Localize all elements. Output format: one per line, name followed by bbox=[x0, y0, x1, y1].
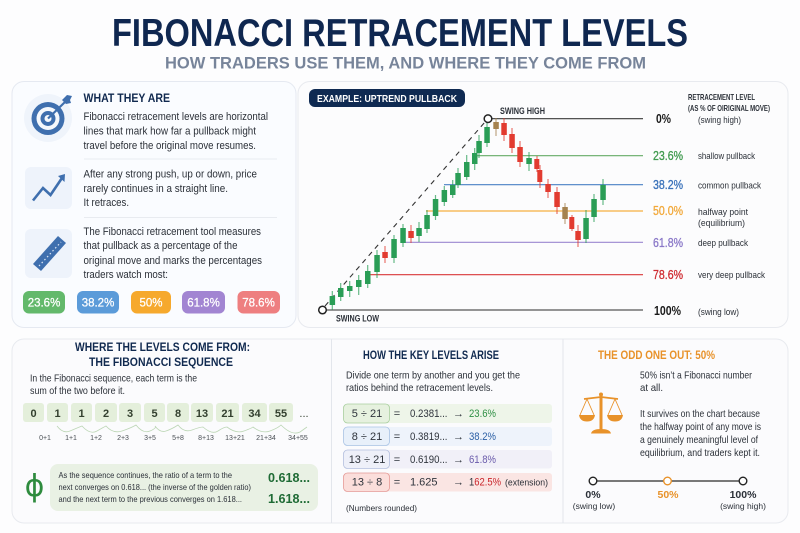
sequence tiles: 8 bbox=[175, 408, 181, 420]
heading: sequence: WHERE THE LEVELS COME FROM: bbox=[75, 340, 250, 354]
ratio row 38.2: 38.2% bbox=[469, 431, 496, 443]
level pills: 61.8% bbox=[187, 298, 220, 310]
sequence tiles: 1 bbox=[54, 408, 61, 420]
sum connectors bbox=[57, 425, 307, 433]
callout: golden ratio: 1.618... bbox=[268, 491, 310, 506]
ratio row 162.5: (extension) bbox=[505, 478, 548, 488]
text block: definition: Fibonacci retracement levels are horizontal bbox=[84, 111, 268, 123]
ratio row 162.5: → bbox=[453, 476, 464, 488]
text block: 50% note: 50% isn’t a Fibonacci number bbox=[640, 370, 753, 382]
sequence tiles: 0 bbox=[30, 408, 37, 420]
level pills: 38.2% bbox=[82, 298, 114, 310]
text block: sequence intro: In the Fibonacci sequence, each term is the bbox=[30, 374, 197, 384]
ratio row 162.5: 162.5% bbox=[469, 476, 501, 488]
level descriptions: deep pullback bbox=[698, 238, 748, 249]
retracement lines bbox=[326, 119, 643, 310]
ratio row 38.2: → bbox=[453, 431, 464, 443]
text block: 50% note: the halfway point of any move is bbox=[640, 422, 761, 433]
swing high marker: SWING HIGH bbox=[500, 106, 545, 116]
heading: key levels: HOW THE KEY LEVELS ARISE bbox=[363, 350, 499, 362]
midpoint scale: 0% bbox=[585, 489, 601, 501]
panel: chart bbox=[298, 82, 788, 328]
text block: 50% note bbox=[640, 370, 761, 459]
level pills: 50% bbox=[139, 298, 163, 310]
ratio row 61.8: 13 ÷ 21 bbox=[349, 454, 385, 466]
level descriptions: halfway point bbox=[698, 207, 748, 218]
ratio row 162.5: = bbox=[394, 476, 400, 488]
text block: 50% note: a genuinely meaningful level of bbox=[640, 435, 758, 446]
chart label bbox=[309, 89, 465, 107]
midpoint scale: 100% bbox=[730, 489, 757, 501]
sequence tiles: 55 bbox=[275, 408, 287, 420]
level descriptions: (swing low) bbox=[698, 307, 739, 318]
icon: balance scale bbox=[579, 392, 623, 434]
ratio row 23.6 bbox=[344, 404, 552, 423]
level pills: 78.6% bbox=[242, 298, 275, 310]
ratio row 61.8: 0.6190... bbox=[410, 454, 448, 466]
level labels: 0% bbox=[656, 112, 671, 126]
callout: golden ratio: next converges on 0.618... (the inverse of the golden ratio) bbox=[58, 482, 251, 492]
ratio row 23.6: → bbox=[453, 408, 464, 420]
text block: key levels intro: ratios behind the retracement levels. bbox=[346, 383, 493, 394]
ratio row 162.5: 1.625 bbox=[410, 476, 438, 488]
level labels: 38.2% bbox=[653, 178, 683, 192]
legend header: RETRACEMENT LEVEL bbox=[688, 92, 755, 102]
sum labels bbox=[39, 435, 308, 442]
legend header: (AS % OF OIRIGINAL MOVE) bbox=[688, 104, 770, 113]
text block: retraces: It retraces. bbox=[84, 197, 129, 209]
heading: what they are: WHAT THEY ARE bbox=[84, 91, 170, 105]
midpoint scale: (swing high) bbox=[720, 501, 766, 511]
text block: sequence intro bbox=[30, 374, 197, 397]
sequence tiles: 1 bbox=[78, 408, 85, 420]
swing low marker: SWING LOW bbox=[336, 314, 379, 324]
icon: phi: ϕ bbox=[25, 469, 44, 504]
text block: retraces bbox=[84, 168, 257, 209]
midpoint scale: (swing low) bbox=[573, 501, 615, 511]
panel: what they are bbox=[12, 82, 296, 328]
swing high marker bbox=[484, 106, 545, 122]
level descriptions bbox=[698, 115, 765, 318]
text block: key levels intro: Divide one term by another and you get the bbox=[346, 370, 520, 382]
heading: odd one out: THE ODD ONE OUT: 50% bbox=[598, 350, 715, 362]
section: odd one out bbox=[573, 350, 766, 511]
level pills bbox=[23, 291, 280, 314]
icon: ruler bbox=[25, 229, 72, 278]
level labels: 100% bbox=[654, 304, 681, 318]
level labels: 78.6% bbox=[653, 268, 683, 282]
sequence tiles: 2 bbox=[103, 408, 109, 420]
sequence tiles: ... bbox=[299, 408, 309, 420]
sum labels: 2+3 bbox=[117, 435, 129, 442]
legend header bbox=[688, 92, 770, 113]
subtitle: HOW TRADERS USE THEM, AND WHERE THEY COME FROM bbox=[165, 54, 646, 72]
text block: definition bbox=[84, 111, 268, 152]
sum labels: 5+8 bbox=[172, 435, 184, 442]
midpoint scale: 50% bbox=[657, 489, 679, 501]
sum labels: 34+55 bbox=[288, 435, 308, 442]
candlesticks bbox=[330, 118, 606, 310]
sum labels: 8+13 bbox=[198, 435, 214, 442]
text block: 50% note: It survives on the chart because bbox=[640, 409, 760, 420]
callout: golden ratio: 0.618... bbox=[268, 470, 310, 485]
ratio row 23.6: 5 ÷ 21 bbox=[352, 408, 382, 420]
text block: 50% note: at all. bbox=[640, 383, 663, 394]
title: FIBONACCI RETRACEMENT LEVELS bbox=[112, 12, 688, 55]
text block: retraces: After any strong push, up or down, price bbox=[84, 168, 257, 180]
heading: sequence: THE FIBONACCI SEQUENCE bbox=[89, 355, 233, 369]
ratio row 38.2: = bbox=[394, 431, 400, 443]
sum labels: 1+1 bbox=[65, 435, 77, 442]
ratio row 162.5 bbox=[344, 473, 552, 492]
level descriptions: shallow pullback bbox=[698, 151, 755, 162]
ratio row 23.6: 23.6% bbox=[469, 408, 496, 420]
sequence tiles: 5 bbox=[151, 408, 158, 420]
ratio row 23.6: 0.2381... bbox=[410, 408, 448, 420]
chart label: EXAMPLE: UPTREND PULLBACK bbox=[317, 93, 457, 105]
note: rounded: (Numbers rounded) bbox=[346, 503, 417, 513]
ratio row 23.6: = bbox=[394, 408, 400, 420]
sequence tiles: 21 bbox=[221, 408, 234, 420]
level descriptions: (equilibrium) bbox=[698, 218, 745, 229]
text block: sequence intro: sum of the two before it. bbox=[30, 386, 125, 397]
level labels bbox=[653, 112, 683, 318]
level labels: 23.6% bbox=[653, 149, 683, 163]
sum labels: 3+5 bbox=[144, 435, 156, 442]
level pills: 23.6% bbox=[28, 298, 60, 310]
level descriptions: (swing high) bbox=[698, 115, 741, 126]
midpoint scale bbox=[573, 477, 766, 511]
sequence tiles: 13 bbox=[196, 408, 208, 420]
level descriptions: very deep pullback bbox=[698, 270, 765, 281]
text block: definition: travel before the original move resumes. bbox=[84, 140, 256, 152]
callout: golden ratio bbox=[50, 464, 318, 511]
ratio row 61.8 bbox=[344, 450, 552, 468]
sequence tiles: 34 bbox=[248, 408, 261, 420]
dashed trend line bbox=[325, 122, 485, 306]
sum labels: 21+34 bbox=[256, 435, 276, 442]
text block: key levels intro bbox=[346, 370, 520, 394]
section: where the levels come from bbox=[23, 340, 318, 511]
callout: golden ratio: and the next term to the previous converges on 1.618... bbox=[58, 494, 242, 504]
ratio row 162.5: 13 ÷ 8 bbox=[352, 476, 382, 488]
heading: sequence bbox=[75, 340, 250, 369]
section: how the key levels arise bbox=[344, 350, 552, 513]
panel: bottom band bbox=[12, 339, 788, 523]
ratio row 61.8: 61.8% bbox=[469, 454, 496, 466]
sequence tiles: 3 bbox=[127, 408, 133, 420]
ratio row 38.2 bbox=[344, 427, 552, 446]
sum labels: 1+2 bbox=[90, 435, 102, 442]
callout: golden ratio: As the sequence continues, the ratio of a term to the bbox=[58, 470, 232, 480]
text block: tool: traders watch most: bbox=[84, 269, 168, 281]
ratio row 38.2: 0.3819... bbox=[410, 431, 448, 443]
swing low marker bbox=[319, 306, 379, 324]
level labels: 50.0% bbox=[653, 204, 683, 218]
text block: 50% note: equilibrium, and traders kept it. bbox=[640, 448, 760, 459]
ratio row 38.2: 8 ÷ 21 bbox=[352, 431, 382, 443]
level labels: 61.8% bbox=[653, 236, 683, 250]
level descriptions: common pullback bbox=[698, 180, 761, 192]
ratio row 61.8: → bbox=[453, 454, 464, 466]
sum labels: 0+1 bbox=[39, 435, 51, 442]
icon: target bbox=[24, 94, 72, 142]
sum labels: 13+21 bbox=[225, 435, 245, 442]
text block: tool bbox=[84, 226, 262, 281]
text block: definition: lines that mark how far a pullback might bbox=[84, 126, 257, 138]
sequence tiles bbox=[23, 403, 309, 422]
text block: tool: original move and marks the percentages bbox=[84, 255, 262, 267]
text block: tool: that pullback as a percentage of the bbox=[84, 240, 238, 252]
text block: tool: The Fibonacci retracement tool measures bbox=[84, 226, 261, 238]
text block: retraces: rarely continues in a straight line. bbox=[84, 183, 228, 195]
ratio row 61.8: = bbox=[394, 454, 400, 466]
icon: trend arrow bbox=[25, 167, 72, 209]
